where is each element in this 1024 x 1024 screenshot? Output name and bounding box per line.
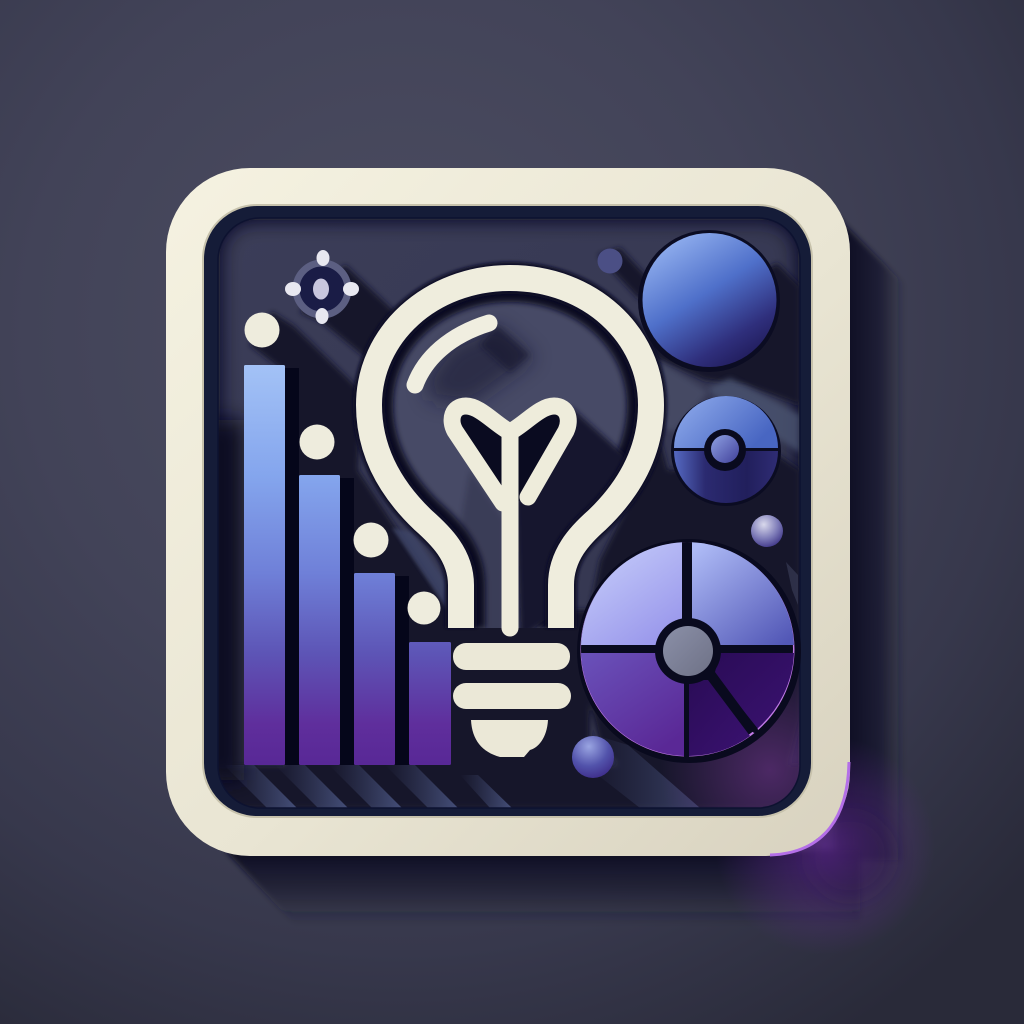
bar chart xyxy=(244,312,451,765)
dot 3 xyxy=(354,522,388,558)
purple panel glow xyxy=(676,680,800,808)
bar 4 xyxy=(409,642,451,765)
small dot top xyxy=(598,248,622,274)
bar 3 xyxy=(354,573,395,765)
rounded frame xyxy=(166,168,850,856)
bulb base xyxy=(453,643,571,757)
lit patch right of pie xyxy=(786,562,798,605)
dot 4 xyxy=(408,592,440,624)
panel diagonal shadows xyxy=(200,248,800,808)
ball icon xyxy=(671,396,781,506)
panel rim edges xyxy=(218,218,800,808)
dot 1 xyxy=(244,312,280,348)
lit strip beside bulb neck xyxy=(392,528,448,610)
bar 2 xyxy=(299,475,340,765)
lit strip below sphere xyxy=(707,378,800,453)
dot 2 xyxy=(300,424,334,460)
small sphere right xyxy=(751,515,783,547)
lit shadow stripes under bars xyxy=(224,765,512,808)
pie chart xyxy=(577,539,801,763)
highlight arc xyxy=(415,323,489,385)
lit stripe under pie xyxy=(604,738,699,808)
large blue sphere xyxy=(638,230,780,372)
bulb outline xyxy=(369,278,651,628)
lit strip beside sphere xyxy=(662,362,706,430)
dark left column xyxy=(218,408,248,783)
light bulb xyxy=(369,278,651,640)
filament xyxy=(452,406,568,628)
bar 1 xyxy=(244,365,285,765)
target icon xyxy=(285,250,359,324)
bar shadows xyxy=(285,368,409,765)
dark inner panel xyxy=(218,218,799,767)
small sphere bottom xyxy=(572,736,614,778)
bulb glass interior xyxy=(369,278,651,628)
glass shadows xyxy=(383,292,637,628)
frame drop shadow xyxy=(225,215,950,960)
